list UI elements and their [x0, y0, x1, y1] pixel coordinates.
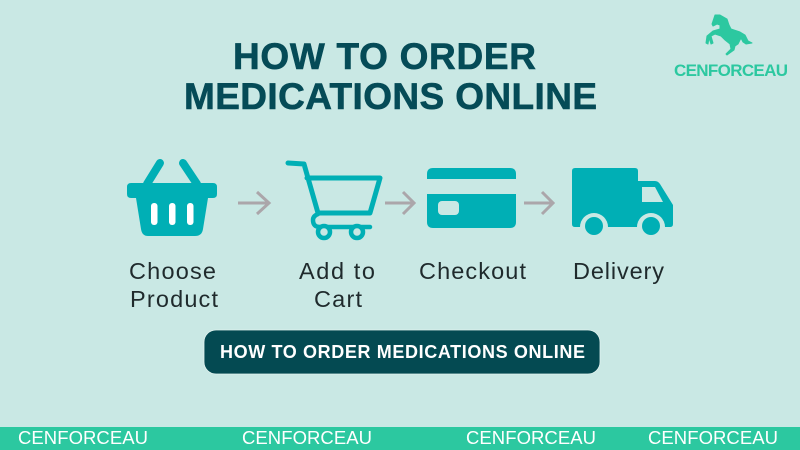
callout button [204, 330, 600, 374]
step labels: Checkout [419, 258, 526, 284]
logo wordmark: CENFORCEAU [674, 61, 788, 80]
footer brand bar [0, 427, 800, 450]
callout button: HOW TO ORDER MEDICATIONS ONLINE [220, 342, 585, 362]
icon: shopping cart [288, 163, 380, 238]
step labels: Add to [299, 258, 375, 284]
step labels: Product [130, 286, 218, 312]
title: HOW TO ORDER [233, 36, 536, 77]
arrow: checkout to delivery [524, 192, 553, 214]
footer brand bar: CENFORCEAU [18, 427, 148, 448]
step labels: Cart [314, 286, 362, 312]
icon: horse [706, 15, 752, 55]
footer brand bar: CENFORCEAU [466, 427, 596, 448]
icon: shopping basket [127, 163, 217, 236]
icon: credit card [427, 168, 516, 228]
logo: Cenforceau [674, 15, 788, 80]
title [184, 36, 597, 117]
arrow: cart to checkout [385, 192, 414, 214]
step labels [129, 258, 664, 312]
footer brand bar: CENFORCEAU [242, 427, 372, 448]
title: MEDICATIONS ONLINE [184, 76, 597, 117]
icon: delivery truck [570, 168, 676, 241]
step labels: Choose [129, 258, 216, 284]
step labels: Delivery [573, 258, 664, 284]
arrow: basket to cart [238, 192, 269, 214]
footer brand bar: CENFORCEAU [648, 427, 778, 448]
